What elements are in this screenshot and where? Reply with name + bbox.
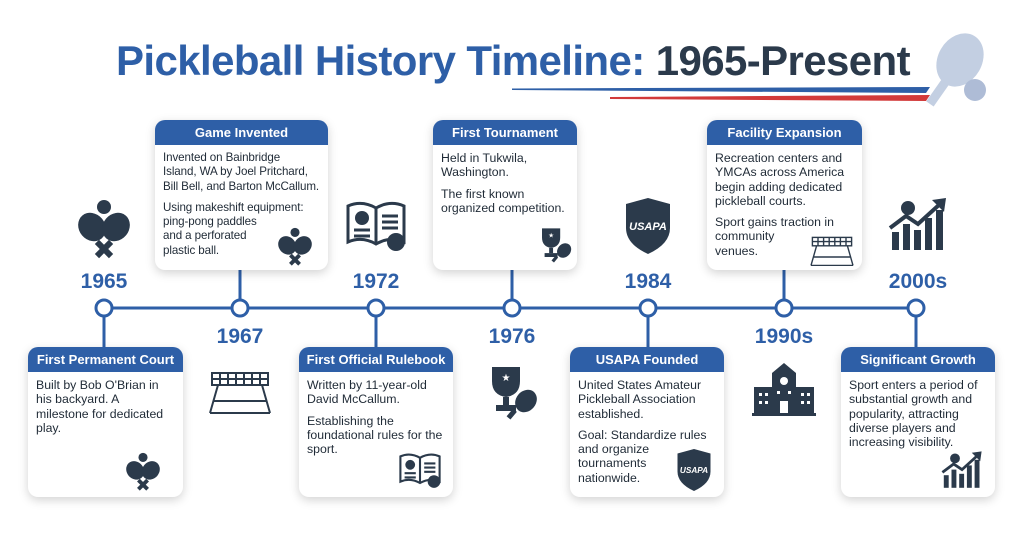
year 1990s: 1990s [755, 325, 813, 348]
card: First Permanent Court: First Permanent Court [37, 352, 174, 367]
card: Facility Expansion: venues. [715, 244, 758, 258]
card: Game Invented: plastic ball. [163, 244, 219, 257]
icon: building 1990s [752, 363, 816, 416]
card: Game Invented: Game Invented [195, 125, 288, 140]
card: First Permanent Court [28, 347, 183, 497]
card: First Permanent Court: play. [36, 421, 61, 435]
year 1965: 1965 [81, 270, 127, 293]
card: First Tournament: The first known organized competition. [441, 187, 565, 215]
card: First Official Rulebook: Written by 11-year-old David McCallum. [307, 378, 427, 406]
card: USAPA Founded: Goal: Standardize rules and organize [578, 428, 707, 456]
icon: trophy 1976 [492, 367, 537, 420]
year 2000s: 2000s [889, 270, 947, 293]
card: First Official Rulebook [299, 347, 453, 497]
year 1984: 1984 [625, 270, 671, 293]
card: First Permanent Court: his backyard. A [36, 392, 119, 406]
card: Game Invented: Bill Bell, and Barton McCallum. [163, 180, 319, 193]
card: Game Invented: and a perforated [163, 229, 246, 242]
card: Facility Expansion: Facility Expansion [727, 125, 842, 140]
card: First Tournament: First Tournament [452, 125, 558, 140]
card: USAPA Founded: tournaments [578, 456, 646, 470]
card: Facility Expansion [707, 120, 862, 270]
card: First Official Rulebook: First Official Rulebook [307, 352, 445, 367]
card: USAPA Founded: USAPA Founded [596, 352, 698, 367]
icon: growth chart 2000s [888, 198, 946, 250]
card: Game Invented: Using makeshift equipment: [163, 201, 303, 214]
card: First Tournament: Washington. [441, 165, 509, 179]
card: Significant Growth [841, 347, 995, 497]
title: Pickleball History Timeline: 1965-Present [116, 37, 910, 84]
card: USAPA Founded: United States Amateur Pickleball Association established. [578, 378, 701, 421]
card: Game Invented: Invented on Bainbridge [163, 151, 280, 164]
icon: book 1972 [346, 202, 406, 251]
card: Game Invented [155, 120, 328, 270]
year 1972: 1972 [353, 270, 399, 293]
icon: USAPA shield 1984 [626, 198, 670, 254]
card: Game Invented: Island, WA by Joel Pritchard, [163, 165, 308, 178]
card: First Permanent Court: milestone for dedicated [36, 407, 163, 421]
card: Facility Expansion: Recreation centers and YMCAs across America begin adding dedicated pickleball courts. [715, 151, 844, 208]
card: First Permanent Court: Built by Bob O'Brian in [36, 378, 159, 392]
icon: net 1967 [209, 372, 271, 414]
title underline [512, 87, 930, 101]
card: USAPA Founded [570, 347, 724, 497]
card: Significant Growth: Sport enters a period of substantial growth and popularity, attracting diverse players and increasing visibility. [849, 378, 978, 449]
card: Facility Expansion: Sport gains traction in community [715, 215, 834, 243]
card: USAPA Founded: nationwide. [578, 471, 640, 485]
card: First Official Rulebook: Establishing the foundational rules for the sport. [307, 414, 442, 456]
card: Game Invented: ping-pong paddles [163, 215, 257, 228]
card: First Tournament: Held in Tukwila, [441, 151, 527, 165]
card: Significant Growth: Significant Growth [860, 352, 976, 367]
card: First Tournament [433, 120, 577, 270]
year 1967: 1967 [217, 325, 263, 348]
year 1976: 1976 [489, 325, 535, 348]
icon: paddles 1965 [78, 200, 130, 258]
icon: paddle header [926, 33, 986, 106]
